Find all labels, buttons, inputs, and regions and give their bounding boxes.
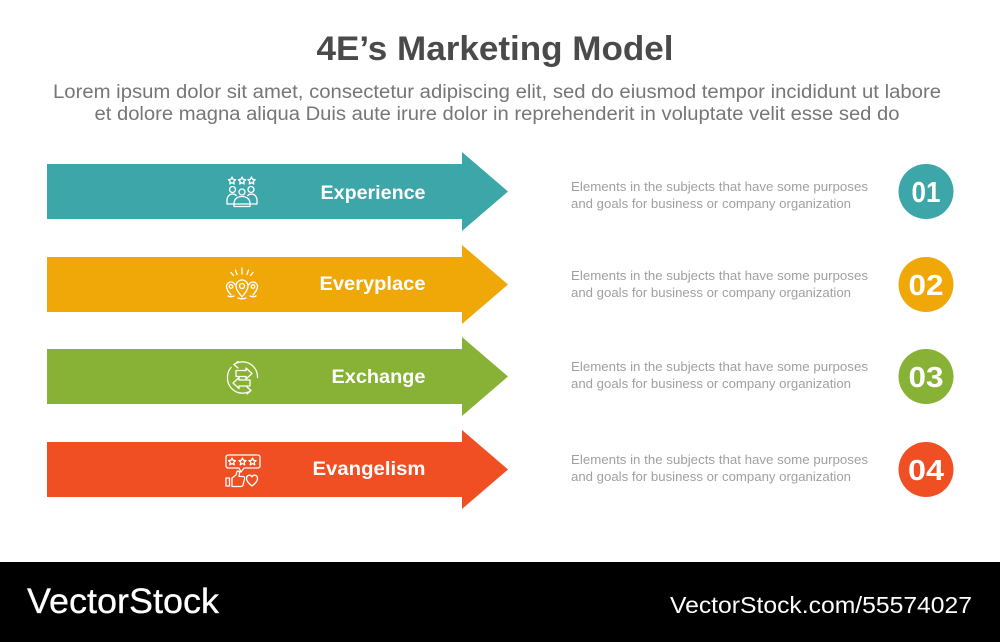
row 2: everyplace [47, 245, 954, 324]
arrow: experience [47, 152, 508, 231]
number badge: 04 [898, 442, 954, 497]
label: evangelism: Evangelism [312, 459, 426, 480]
description: everyplace [571, 268, 869, 300]
title: 4E’s Marketing Model [316, 30, 674, 68]
description: experience: Elements in the subjects that have some purposes [571, 179, 869, 194]
label: exchange: Exchange [332, 367, 426, 388]
description: experience: and goals for business or company organization [571, 196, 851, 211]
row 4: evangelism [47, 430, 954, 509]
description: exchange [571, 359, 869, 391]
description: everyplace: Elements in the subjects that have some purposes [571, 268, 869, 283]
row 3: exchange [47, 337, 954, 416]
footer image id: VectorStock.com/55574027 [670, 592, 972, 618]
description: experience [571, 179, 869, 211]
icon: rating, thumb and heart [226, 455, 260, 486]
number badge: 01: 01 [912, 177, 940, 209]
label: experience: Experience [320, 183, 426, 204]
arrow: exchange [47, 337, 508, 416]
label: everyplace: Everyplace [320, 274, 426, 295]
number badge: 01 [898, 164, 954, 219]
number badge: 02: 02 [908, 270, 944, 302]
icon: people with stars [227, 177, 257, 206]
subtitle text: Lorem ipsum dolor sit amet, consectetur adipiscing elit, sed do eiusmod tempor incididunt ut labore [53, 82, 941, 103]
description: everyplace: and goals for business or company organization [571, 285, 851, 300]
arrow: evangelism [47, 430, 508, 509]
number badge: 02 [898, 257, 954, 312]
icon: location pins [226, 268, 258, 299]
arrow: everyplace [47, 245, 508, 324]
number badge: 03: 03 [908, 362, 944, 394]
description: evangelism [571, 452, 869, 484]
subtitle text: et dolore magna aliqua Duis aute irure dolor in reprehenderit in voluptate velit esse sed do [94, 104, 899, 125]
subtitle text [53, 82, 941, 125]
footer logo: VectorStock [27, 582, 220, 621]
number badge: 04: 04 [908, 455, 944, 487]
description: exchange: and goals for business or company organization [571, 376, 851, 391]
number badge: 03 [898, 349, 954, 404]
description: evangelism: Elements in the subjects that have some purposes [571, 452, 869, 467]
icon: exchange arrows [227, 362, 258, 394]
footer bar [0, 562, 1000, 642]
description: exchange: Elements in the subjects that have some purposes [571, 359, 869, 374]
description: evangelism: and goals for business or company organization [571, 469, 851, 484]
row 1: experience [47, 152, 954, 231]
